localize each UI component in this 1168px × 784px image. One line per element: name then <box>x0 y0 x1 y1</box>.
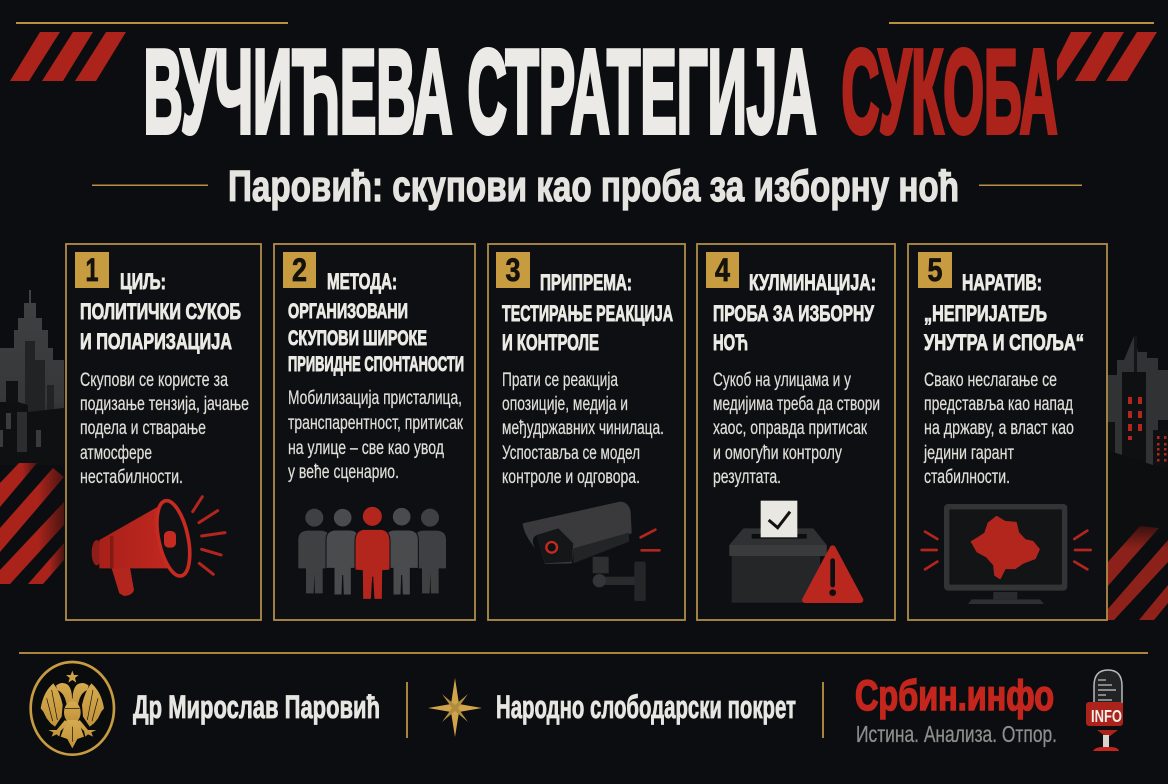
decoration: left skyline <box>0 290 64 465</box>
heading 1: И ПОЛАРИЗАЦИЈА <box>80 329 232 354</box>
footer divider line <box>19 652 1148 654</box>
heading 5: „НЕПРИЈАТЕЉ <box>924 301 1047 326</box>
body text 1: Скупови се користе за <box>80 370 228 391</box>
panel: 1 цил <box>66 244 261 620</box>
icon: crowd <box>298 506 446 599</box>
icon: double headed eagle emblem <box>31 662 114 755</box>
card frame 4 <box>697 244 895 620</box>
heading 2 <box>288 269 464 376</box>
number badge 1 <box>75 252 109 288</box>
body text 4: медијима треба да створи <box>713 394 880 415</box>
subtitle right line <box>979 184 1082 186</box>
body text 3 <box>502 370 664 488</box>
body text 5: једини гарант <box>923 443 1014 464</box>
card frame 1 <box>66 244 261 620</box>
heading 4 <box>713 270 876 355</box>
decoration: top right red stripes <box>1057 32 1157 81</box>
heading 5: НАРАТИВ: <box>962 270 1042 295</box>
brand <box>855 672 1057 747</box>
title <box>144 26 1058 158</box>
body text 2 <box>288 388 464 483</box>
body text 3: опозиције, медија и <box>502 394 628 415</box>
body text 3: међудржавних чинилаца. <box>502 418 664 439</box>
body text 5 <box>923 370 1074 488</box>
decoration: top left gold line <box>16 22 288 24</box>
brand slogan: Истина. Анализа. Отпор. <box>856 721 1057 747</box>
heading 3: ТЕСТИРАЊЕ РЕАКЦИЈА <box>502 301 673 326</box>
brand name: Србин.инфо <box>855 672 1054 720</box>
body text 5: Свако неслагање се <box>924 370 1057 391</box>
body text 4 <box>713 370 880 488</box>
subtitle: Паровић: скупови као проба за изборну ноћ <box>228 162 959 211</box>
number badge 2: 2 <box>292 252 307 288</box>
footer separator 1 <box>406 682 408 738</box>
icon: security camera <box>523 502 659 601</box>
heading 3: ПРИПРЕМА: <box>540 270 632 295</box>
body text 2: на улице – све као увод <box>288 438 444 459</box>
body text 5: представља као напад <box>924 394 1073 415</box>
body text 2: транспарентност, притисак <box>288 413 464 434</box>
number badge 4 <box>706 252 739 288</box>
heading 1: ПОЛИТИЧКИ СУКОБ <box>80 299 241 324</box>
body text 4: и омогући контролу <box>713 443 842 464</box>
body text 1: подизање тензија, јачање <box>80 394 249 415</box>
icon: ballot box with warning <box>729 501 860 603</box>
icon: compass star <box>428 678 482 737</box>
number badge 3: 3 <box>506 252 520 288</box>
icon: television with map <box>922 504 1091 604</box>
body text 4: хаос, оправда притисак <box>713 418 868 439</box>
subtitle left line <box>92 184 208 186</box>
author name: Др Мирослав Паровић <box>133 689 380 725</box>
decoration: top left red stripes <box>10 32 126 81</box>
heading 1: ЦИЉ: <box>120 269 166 294</box>
heading 4: НОЋ <box>713 330 748 355</box>
card frame 5 <box>908 244 1107 620</box>
heading 2: МЕТОДА: <box>327 269 397 294</box>
decoration: left red diagonal stripes <box>0 463 64 584</box>
body text 3: контроле и одговора. <box>502 467 640 488</box>
heading 2: СКУПОВИ ШИРОКЕ <box>288 327 427 350</box>
heading 2: ОРГАНИЗОВАНИ <box>288 300 408 323</box>
heading 4: КУЛМИНАЦИЈА: <box>749 270 876 295</box>
number badge 3 <box>496 252 530 288</box>
decoration: right skyline <box>1107 336 1168 560</box>
panel: 3 припрема <box>488 244 685 620</box>
heading 5 <box>924 270 1084 355</box>
number badge 4: 4 <box>715 252 730 288</box>
icon: info microphone: INFO <box>1091 706 1122 726</box>
body text 4: Сукоб на улицама и у <box>713 370 851 391</box>
number badge 2 <box>283 252 316 288</box>
body text 5: стабилности. <box>924 467 1010 488</box>
card frame 3 <box>488 244 685 620</box>
heading 2: ПРИВИДНЕ СПОНТАНОСТИ <box>288 353 464 376</box>
card frame 2 <box>274 244 475 620</box>
number badge 5: 5 <box>928 252 942 288</box>
number badge 1: 1 <box>86 252 98 288</box>
body text 2: Мобилизација присталица, <box>288 388 462 409</box>
number badge 5 <box>918 252 952 288</box>
body text 3: Успоставља се модел <box>502 443 640 464</box>
panel: 2 метода <box>274 244 475 620</box>
body text 1: нестабилности. <box>80 467 183 488</box>
panel: 4 кулминација <box>697 244 895 620</box>
heading 3 <box>502 270 673 355</box>
decoration: right red diagonal stripes <box>1107 526 1168 620</box>
body text 5: на државу, а власт као <box>924 418 1074 439</box>
body text 2: у веће сценарио. <box>288 462 399 483</box>
icon: megaphone <box>92 497 225 596</box>
panel: 5 наратив <box>908 244 1107 620</box>
heading 4: ПРОБА ЗА ИЗБОРНУ <box>713 301 875 326</box>
heading 1 <box>80 269 241 354</box>
body text 3: Прати се реакција <box>502 370 618 391</box>
icon: info microphone <box>1086 670 1123 751</box>
decoration: top right gold line <box>889 22 1154 24</box>
heading 5: УНУТРА И СПОЉА“ <box>924 330 1084 355</box>
footer separator 2 <box>822 682 824 738</box>
movement name: Народно слободарски покрет <box>496 689 796 725</box>
heading 3: И КОНТРОЛЕ <box>502 330 599 355</box>
body text 1: атмосфере <box>80 443 152 464</box>
body text 1 <box>80 370 249 488</box>
body text 4: резултата. <box>713 467 781 488</box>
body text 1: подела и стварање <box>80 418 206 439</box>
